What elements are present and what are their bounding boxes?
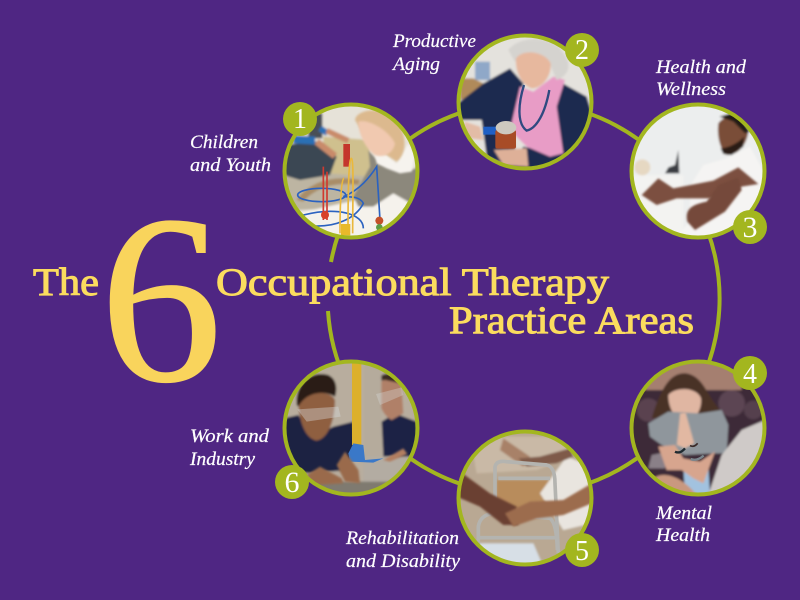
panel: health and wellness bbox=[627, 57, 770, 244]
label: Mental Health: Health bbox=[655, 525, 710, 546]
panel: children and youth bbox=[190, 100, 423, 243]
number badge 4: 4 bbox=[743, 359, 757, 390]
label: Children and Youth: Children bbox=[190, 132, 258, 153]
photo: man stretching his arm bbox=[634, 106, 762, 236]
connecting ring line bbox=[328, 102, 720, 494]
title word: The: The bbox=[33, 261, 99, 304]
photo frame ring bbox=[284, 362, 418, 494]
label: Children and Youth bbox=[190, 132, 271, 176]
number badge 5: 5 bbox=[575, 536, 589, 567]
photo: trainee and mentor at a bandsaw bbox=[286, 364, 416, 492]
label: Mental Health: Mental bbox=[655, 503, 712, 524]
number badge 4 bbox=[733, 356, 767, 390]
number badge 5 bbox=[565, 533, 599, 567]
number badge 3 bbox=[733, 210, 767, 244]
photo frame ring bbox=[632, 104, 764, 238]
number badge 3: 3 bbox=[742, 211, 758, 244]
photo: young woman in counselling bbox=[634, 364, 762, 492]
number badge 6: 6 bbox=[284, 466, 300, 499]
label: Work and Industry: Work and bbox=[190, 426, 270, 447]
panel: rehabilitation and disability bbox=[345, 427, 599, 572]
label: Rehabilitation and Disability: and Disability bbox=[346, 551, 461, 572]
photo: older woman opening a jar bbox=[460, 38, 590, 166]
panel: work and industry bbox=[189, 357, 423, 500]
label: Children and Youth: and Youth bbox=[190, 155, 271, 176]
label: Rehabilitation and Disability: Rehabilitation bbox=[345, 528, 459, 549]
number badge 2: 2 bbox=[575, 35, 589, 66]
photo frame ring bbox=[458, 432, 592, 564]
photo: child playing with bead maze bbox=[286, 106, 416, 236]
big numeral 6: 6 bbox=[100, 166, 222, 432]
number badge 1: 1 bbox=[293, 104, 307, 135]
title bbox=[33, 166, 694, 432]
photo: hands supporting a walker user bbox=[460, 434, 590, 562]
label: Productive Aging: Productive bbox=[392, 31, 476, 52]
photo frame ring bbox=[632, 362, 764, 494]
label: Health and Wellness bbox=[655, 57, 747, 100]
panel: mental health bbox=[625, 355, 770, 546]
title line: Practice Areas: Practice Areas bbox=[449, 299, 694, 342]
number badge 1 bbox=[283, 102, 317, 136]
panel: productive aging bbox=[391, 31, 599, 173]
label: Work and Industry bbox=[189, 426, 270, 470]
label: Work and Industry: Industry bbox=[189, 449, 256, 470]
label: Health and Wellness: Wellness bbox=[656, 79, 726, 100]
label: Rehabilitation and Disability bbox=[345, 528, 461, 572]
title line: Occupational Therapy: Occupational Therapy bbox=[216, 261, 610, 304]
label: Productive Aging: Aging bbox=[391, 54, 440, 75]
label: Mental Health bbox=[655, 503, 712, 546]
number badge 6 bbox=[275, 465, 309, 499]
label: Health and Wellness: Health and bbox=[655, 57, 747, 78]
photo frame ring bbox=[458, 36, 592, 168]
number badge 2 bbox=[565, 33, 599, 67]
label: Productive Aging bbox=[391, 31, 476, 75]
photo frame ring bbox=[284, 104, 418, 238]
